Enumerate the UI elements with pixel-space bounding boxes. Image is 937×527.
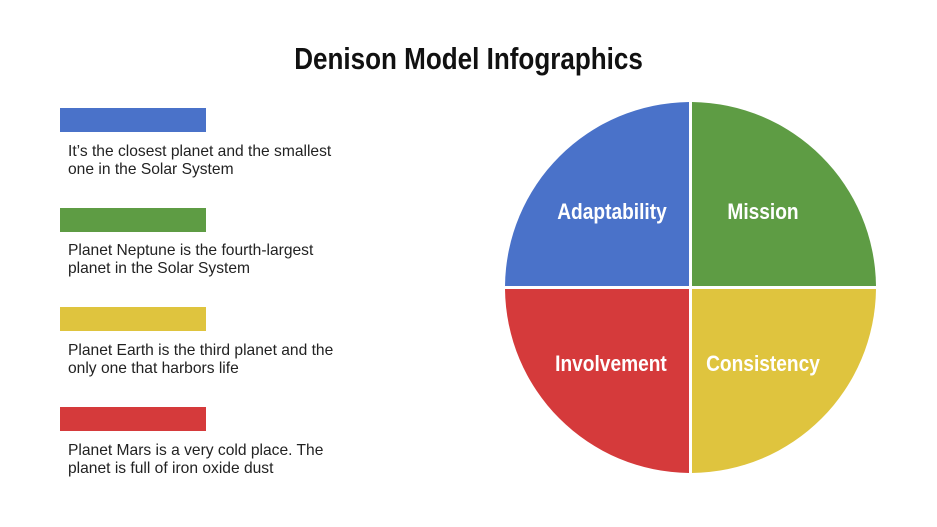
text: green: Planet Neptune is the fourth-largest bbox=[68, 242, 313, 259]
text: red bbox=[68, 442, 323, 477]
quadrant: Mission bbox=[692, 102, 876, 286]
quadrant: Adaptability bbox=[505, 102, 689, 286]
text: yellow: Planet Earth is the third planet and the bbox=[68, 342, 333, 359]
title: Denison Model Infographics bbox=[294, 41, 643, 76]
legend bar: blue bbox=[60, 108, 206, 132]
text: blue bbox=[68, 143, 332, 178]
text: blue: It’s the closest planet and the smallest bbox=[68, 143, 331, 160]
quadrant: Consistency bbox=[692, 289, 876, 473]
quadrant: Involvement: Involvement bbox=[555, 352, 667, 376]
legend bar: green bbox=[60, 208, 206, 232]
text: yellow bbox=[68, 342, 333, 377]
text: red: Planet Mars is a very cold place. The bbox=[68, 442, 323, 459]
quadrant: Involvement bbox=[505, 289, 689, 473]
text: green: planet in the Solar System bbox=[68, 260, 250, 277]
quadrant: Mission: Mission bbox=[727, 200, 799, 224]
legend bar: yellow bbox=[60, 307, 206, 331]
legend bar: red bbox=[60, 407, 206, 431]
text: green bbox=[68, 242, 314, 277]
text: red: planet is full of iron oxide dust bbox=[68, 460, 273, 477]
quadrant: Adaptability: Adaptability bbox=[557, 200, 667, 224]
quadrant: Consistency: Consistency bbox=[706, 352, 820, 376]
text: blue: one in the Solar System bbox=[68, 161, 234, 178]
text: yellow: only one that harbors life bbox=[68, 360, 239, 377]
